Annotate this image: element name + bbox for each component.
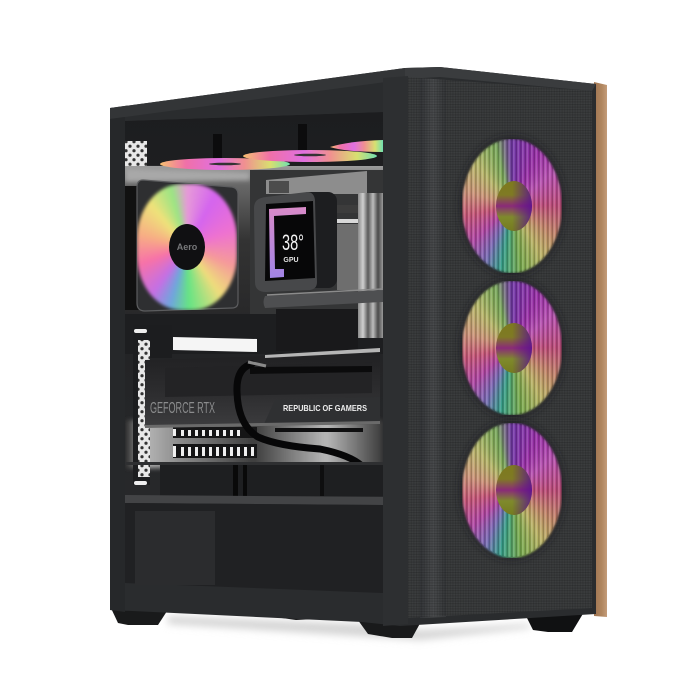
floor shadow [168,616,530,640]
LCD screen: 38° [282,230,304,255]
AIO pump with LCD [254,192,337,292]
ROG label: REPUBLIC OF GAMERS [283,403,367,413]
top radiator fans [160,140,383,170]
LCD screen [265,201,315,281]
GPU cable [237,362,362,466]
feet [110,606,584,638]
PCI slot covers [173,427,257,458]
PSU shroud [125,495,383,593]
front fan bottom [462,423,562,558]
graphics card [145,348,380,432]
top exhaust brackets [125,124,307,166]
GPU label: GEFORCE RTX [150,400,215,417]
side fan: Aero [177,242,198,252]
PCI bracket [133,325,172,485]
illustration: PC case [110,67,607,643]
panel: window interior [125,112,383,471]
front fan top [462,139,562,273]
panel: case body [110,67,596,626]
white slot [173,337,257,352]
panel: corner and front mesh [383,76,592,626]
bottom fans [125,462,383,496]
LCD screen: GPU [283,257,299,264]
panel: wood side strip [594,82,607,617]
cooler tubes [264,289,383,351]
motherboard parts behind cooler [266,171,383,338]
side fan [125,180,238,311]
front fan middle [462,281,562,415]
